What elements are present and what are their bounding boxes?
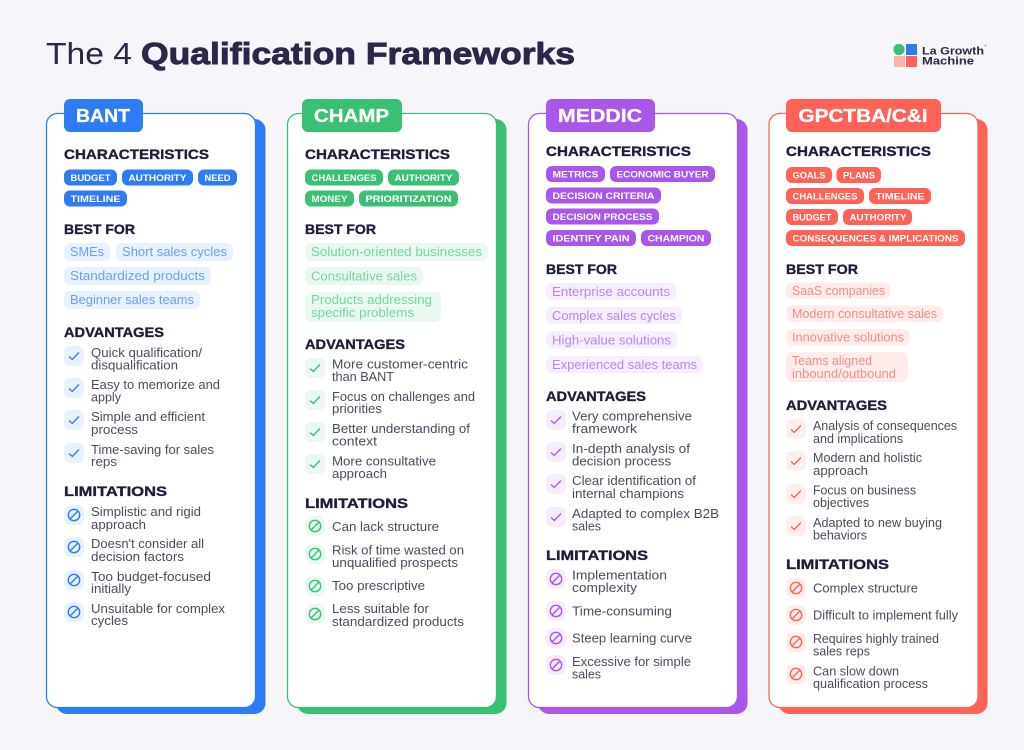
card: [288, 114, 506, 714]
limitations list: qualification process: [813, 677, 928, 691]
tab: GPCTBA/C&I: GPCTBA/C&I: [798, 106, 928, 126]
heading: limitations: LIMITATIONS: [786, 556, 889, 572]
best-for pills: Modern consultative sales: [792, 307, 937, 321]
heading: advantages: ADVANTAGES: [786, 397, 887, 413]
advantages list: Analysis of consequences: [813, 419, 957, 433]
limitations list: Can slow down: [813, 664, 899, 678]
limitations list: Steep learning curve: [572, 632, 692, 646]
heading: limitations: LIMITATIONS: [64, 483, 167, 499]
logo: La Growth Machine: Machine: [922, 56, 974, 68]
limitations list: Complex structure: [813, 582, 918, 596]
heading: best for: BEST FOR: [64, 221, 135, 237]
tab: BANT: [64, 99, 143, 132]
heading: limitations: LIMITATIONS: [546, 547, 648, 563]
limitations list: Too budget-focused: [91, 570, 211, 584]
best-for pills: Innovative solutions: [792, 330, 904, 344]
panel: CHAMP: [288, 99, 506, 714]
tags: DECISION PROCESS: [552, 212, 652, 223]
heading: best for: BEST FOR: [546, 261, 617, 277]
tags: IDENTIFY PAIN: [552, 234, 630, 244]
advantages list: [786, 419, 957, 542]
tags: METRICS: [552, 170, 598, 180]
limitations list: Unsuitable for complex: [91, 602, 226, 616]
best-for pills: inbound/outbound: [792, 367, 896, 381]
advantages list: In-depth analysis of: [572, 442, 691, 456]
tags: CHALLENGES: [792, 192, 858, 202]
tab: CHAMP: CHAMP: [314, 106, 389, 126]
tags: CONSEQUENCES & IMPLICATIONS: [792, 234, 958, 244]
limitations list: Risk of time wasted on: [332, 544, 464, 558]
best-for pills: Short sales cycles: [122, 245, 227, 259]
title: Qualification Frameworks: [141, 36, 575, 71]
best-for pills: Complex sales cycles: [552, 309, 676, 323]
best-for pills: specific problems: [311, 306, 414, 320]
tags: GOALS: [792, 170, 826, 182]
heading: advantages: ADVANTAGES: [305, 336, 405, 352]
best-for pills: [64, 243, 233, 309]
heading: advantages: ADVANTAGES: [64, 324, 164, 340]
advantages list: internal champions: [572, 487, 684, 501]
heading: characteristics: CHARACTERISTICS: [305, 146, 450, 162]
tags: PLANS: [843, 170, 875, 182]
tags: NEED: [204, 173, 231, 184]
advantages list: Quick qualification/: [91, 346, 203, 360]
limitations list: approach: [91, 518, 146, 532]
tags: DECISION CRITERIA: [552, 191, 655, 202]
tags: AUTHORITY: [394, 173, 453, 184]
panel: BANT: [46, 99, 266, 714]
advantages list: reps: [91, 455, 117, 469]
advantages list: More customer-centric: [332, 358, 468, 372]
advantages list: sales: [572, 520, 601, 534]
advantages list: Modern and holistic: [813, 451, 922, 465]
best-for pills: Experienced sales teams: [552, 358, 697, 372]
advantages list: process: [91, 423, 138, 437]
advantages list: Focus on challenges and: [332, 390, 475, 404]
limitations list: complexity: [572, 581, 638, 595]
advantages list: approach: [813, 464, 868, 478]
advantages list: [546, 410, 719, 534]
logo: La Growth Machine: [893, 43, 987, 68]
limitations list: Can lack structure: [332, 520, 439, 534]
best-for pills: [305, 243, 488, 322]
tab: MEDDIC: [546, 99, 655, 132]
limitations list: Less suitable for: [332, 602, 429, 616]
tags: BUDGET: [792, 212, 832, 224]
limitations list: Excessive for simple: [572, 655, 691, 669]
tab: BANT: BANT: [76, 106, 130, 126]
best-for pills: High-value solutions: [552, 334, 671, 348]
tab: CHAMP: [302, 99, 402, 132]
best-for pills: [786, 282, 943, 382]
advantages list: Very comprehensive: [572, 410, 692, 424]
advantages list: approach: [332, 467, 387, 481]
tags: TIMELINE: [876, 192, 924, 202]
heading: limitations: LIMITATIONS: [305, 495, 408, 511]
tags: TIMELINE: [70, 194, 120, 205]
tags: CHALLENGES: [312, 173, 376, 184]
tags: BUDGET: [70, 173, 111, 184]
limitations list: Doesn't consider all: [91, 537, 204, 551]
advantages list: behaviors: [813, 528, 867, 542]
advantages list: objectives: [813, 496, 869, 510]
tags: [305, 170, 459, 206]
best-for pills: SaaS companies: [792, 284, 885, 298]
advantages list: framework: [572, 422, 638, 436]
advantages list: apply: [91, 390, 122, 404]
advantages list: priorities: [332, 402, 382, 416]
advantages list: Better understanding of: [332, 422, 471, 436]
tags: ECONOMIC BUYER: [616, 170, 709, 180]
title: The 4: [46, 36, 132, 71]
tab: MEDDIC: MEDDIC: [558, 106, 642, 126]
best-for pills: [546, 283, 703, 373]
limitations list: initially: [91, 582, 132, 596]
best-for pills: Products addressing: [311, 293, 432, 307]
limitations list: Time-consuming: [572, 604, 672, 618]
limitations list: [64, 505, 226, 628]
limitations list: Simplistic and rigid: [91, 505, 201, 519]
limitations list: sales reps: [813, 644, 870, 658]
advantages list: Simple and efficient: [91, 410, 206, 424]
limitations list: [546, 568, 692, 682]
card: [46, 114, 266, 714]
advantages list: disqualification: [91, 358, 178, 372]
logo: La Growth Machine: ®: [984, 43, 987, 48]
tags: [786, 167, 965, 246]
limitations list: Implementation: [572, 568, 667, 582]
tags: PRIORITIZATION: [366, 194, 452, 205]
advantages list: [305, 358, 475, 481]
card: [528, 114, 748, 714]
heading: best for: BEST FOR: [305, 221, 376, 237]
panel: GPCTBA/C&I: [769, 99, 988, 714]
tags: CHAMPION: [648, 234, 705, 244]
advantages list: Clear identification of: [572, 474, 697, 488]
panel: MEDDIC: [528, 99, 748, 714]
best-for pills: Teams aligned: [792, 354, 872, 368]
best-for pills: Enterprise accounts: [552, 285, 670, 299]
tags: AUTHORITY: [128, 173, 187, 184]
limitations list: [786, 578, 959, 691]
tags: [546, 166, 715, 246]
advantages list: Adapted to complex B2B: [572, 507, 719, 521]
advantages list: context: [332, 434, 378, 448]
best-for pills: Consultative sales: [311, 270, 417, 284]
limitations list: [305, 516, 464, 629]
tags: MONEY: [312, 194, 348, 205]
advantages list: More consultative: [332, 454, 436, 468]
limitations list: unqualified prospects: [332, 556, 458, 570]
card: [769, 114, 988, 714]
advantages list: Adapted to new buying: [813, 516, 942, 530]
advantages list: Time-saving for sales: [91, 443, 214, 457]
tags: [64, 170, 237, 206]
heading: advantages: ADVANTAGES: [546, 388, 646, 404]
advantages list: and implications: [813, 432, 903, 446]
limitations list: standardized products: [332, 615, 464, 629]
tab: GPCTBA/C&I: [786, 99, 941, 132]
best-for pills: Solution-oriented businesses: [311, 245, 482, 259]
limitations list: decision factors: [91, 550, 184, 564]
advantages list: [64, 346, 220, 469]
heading: characteristics: CHARACTERISTICS: [64, 146, 209, 162]
advantages list: Easy to memorize and: [91, 378, 220, 392]
tags: AUTHORITY: [850, 212, 907, 224]
limitations list: Difficult to implement fully: [813, 608, 959, 622]
limitations list: sales: [572, 668, 601, 682]
best-for pills: SMEs: [70, 245, 104, 259]
heading: characteristics: CHARACTERISTICS: [546, 143, 691, 159]
limitations list: Too prescriptive: [332, 579, 425, 593]
best-for pills: Standardized products: [70, 269, 205, 283]
limitations list: cycles: [91, 614, 128, 628]
limitations list: Requires highly trained: [813, 632, 939, 646]
heading: characteristics: CHARACTERISTICS: [786, 143, 931, 159]
heading: best for: BEST FOR: [786, 261, 858, 277]
advantages list: than BANT: [332, 370, 394, 384]
advantages list: decision process: [572, 454, 671, 468]
advantages list: Focus on business: [813, 484, 916, 498]
logo: La Growth Machine: La Growth: [922, 46, 984, 58]
best-for pills: Beginner sales teams: [70, 293, 194, 307]
